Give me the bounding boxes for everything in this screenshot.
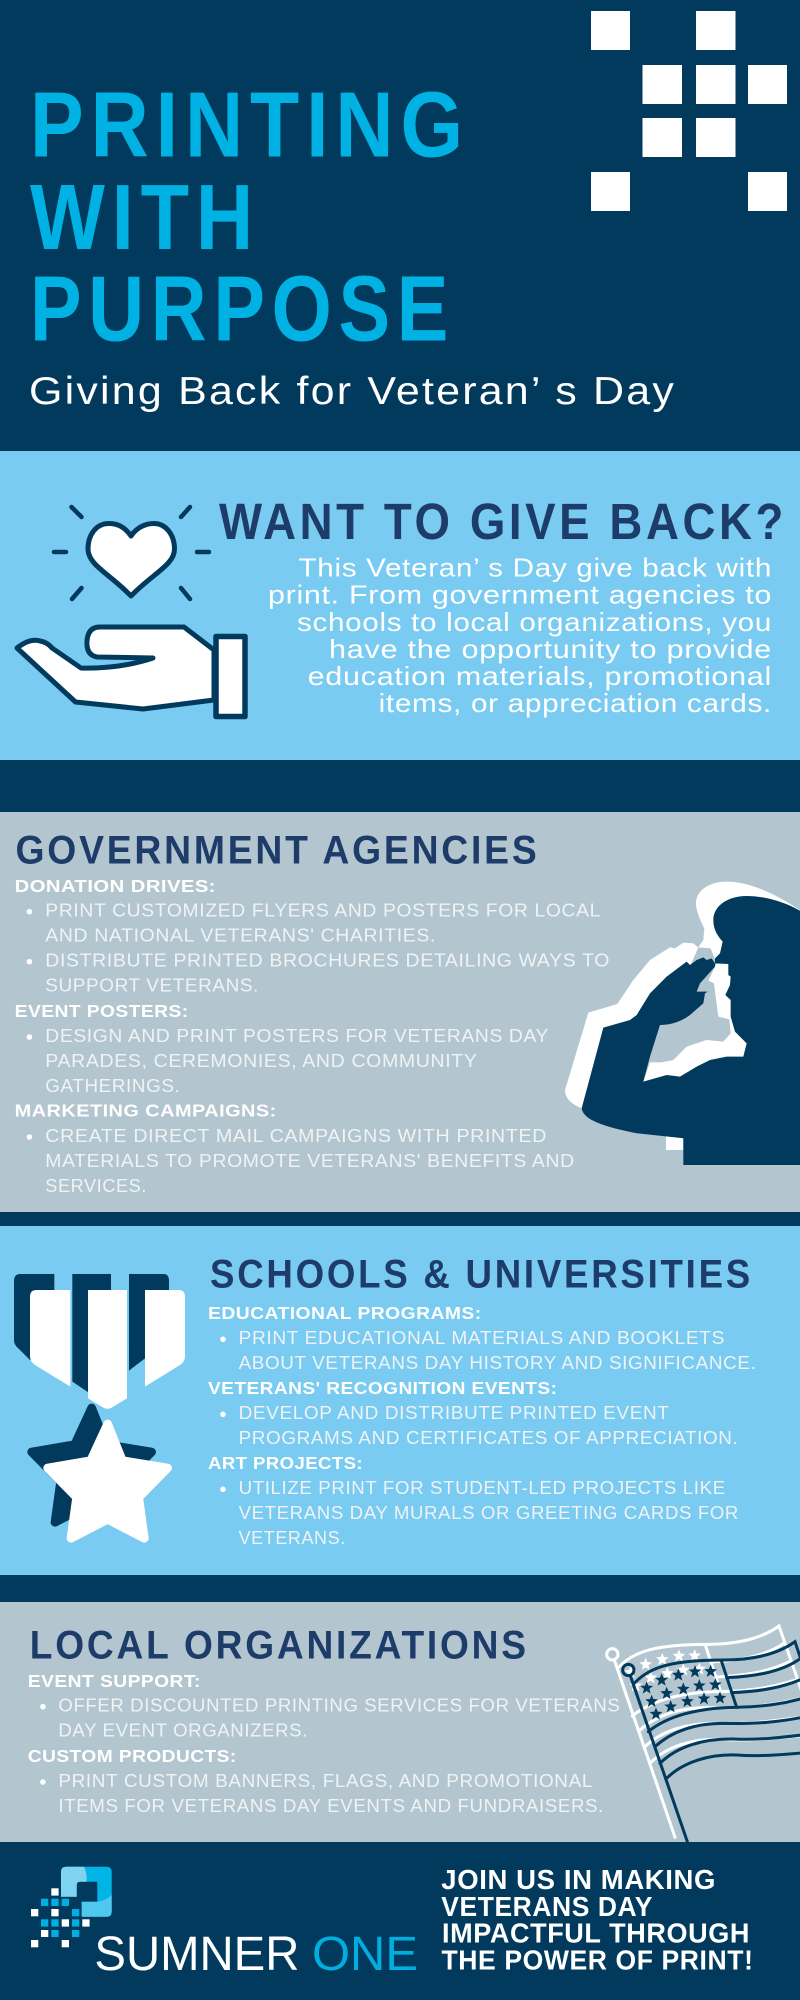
text block: donation drives bbox=[15, 876, 610, 996]
panel: local organizations bbox=[0, 1602, 800, 1842]
title: WITH bbox=[30, 165, 260, 269]
text block: marketing campaigns: CREATE DIRECT MAIL CAMPAIGNS WITH PRINTED bbox=[45, 1126, 547, 1146]
text block: event posters: GATHERINGS. bbox=[45, 1076, 180, 1096]
panel background bbox=[0, 812, 800, 1212]
text block: marketing campaigns: MATERIALS TO PROMOTE VETERANS' BENEFITS AND bbox=[45, 1151, 575, 1171]
icon: saluting soldier bbox=[565, 882, 800, 1165]
wordmark: SUMNER: SUMNER bbox=[94, 1928, 299, 1981]
wordmark: ONE: ONE bbox=[312, 1928, 418, 1981]
body text: schools to local organizations, you bbox=[297, 607, 772, 637]
text block: educational programs: ABOUT VETERANS DAY HISTORY AND SIGNIFICANCE. bbox=[239, 1353, 756, 1373]
callout: join us: THE POWER OF PRINT! bbox=[442, 1944, 754, 1975]
text block: custom products: PRINT CUSTOM BANNERS, FLAGS, AND PROMOTIONAL bbox=[58, 1771, 593, 1791]
subtitle: Giving Back for Veteran’ s Day bbox=[29, 370, 676, 413]
panel background bbox=[0, 451, 800, 760]
icon: flag bbox=[607, 1626, 800, 1842]
text block: event posters: DESIGN AND PRINT POSTERS FOR VETERANS DAY bbox=[45, 1026, 549, 1046]
text block: custom products bbox=[28, 1746, 604, 1816]
text block: recognition events bbox=[208, 1378, 738, 1448]
text block: event support: EVENT SUPPORT: bbox=[28, 1671, 201, 1691]
body text: education materials, promotional bbox=[308, 661, 772, 691]
logo: Sumner One bbox=[31, 1867, 418, 1981]
heading: SCHOOLS & UNIVERSITIES bbox=[210, 1253, 753, 1297]
text block: educational programs: PRINT EDUCATIONAL MATERIALS AND BOOKLETS bbox=[239, 1328, 725, 1348]
panel: government agencies bbox=[0, 812, 800, 1212]
heading: GOVERNMENT AGENCIES bbox=[16, 829, 540, 873]
text block: event posters: PARADES, CEREMONIES, AND COMMUNITY bbox=[45, 1051, 478, 1071]
text block: event support: DAY EVENT ORGANIZERS. bbox=[58, 1721, 308, 1741]
callout: join us bbox=[441, 1864, 754, 1975]
panel: schools and universities bbox=[0, 1226, 800, 1575]
text block: event support bbox=[28, 1671, 620, 1741]
text block: event support: OFFER DISCOUNTED PRINTING SERVICES FOR VETERANS bbox=[58, 1696, 620, 1716]
body text bbox=[268, 553, 772, 718]
icon: pixel squares bbox=[591, 11, 787, 211]
panel: want to give back bbox=[0, 451, 800, 760]
text block: art projects: UTILIZE PRINT FOR STUDENT-LED PROJECTS LIKE bbox=[239, 1478, 726, 1498]
text block: art projects bbox=[208, 1453, 739, 1548]
text block: event posters bbox=[15, 1001, 549, 1096]
text block: marketing campaigns: SERVICES. bbox=[45, 1176, 147, 1196]
panel: footer bbox=[31, 1864, 754, 1981]
icon: logo mark bbox=[31, 1867, 112, 1947]
panel background bbox=[0, 1226, 800, 1575]
text block: recognition events: PROGRAMS AND CERTIFICATES OF APPRECIATION. bbox=[239, 1428, 738, 1448]
title: PURPOSE bbox=[30, 257, 455, 361]
text block: donation drives: PRINT CUSTOMIZED FLYERS AND POSTERS FOR LOCAL bbox=[45, 901, 601, 921]
text block: educational programs bbox=[208, 1303, 756, 1373]
text block: art projects: VETERANS DAY MURALS OR GREETING CARDS FOR bbox=[239, 1503, 739, 1523]
text block: donation drives: SUPPORT VETERANS. bbox=[45, 976, 259, 996]
text block: donation drives: AND NATIONAL VETERANS' CHARITIES. bbox=[45, 926, 436, 946]
text block: donation drives: DISTRIBUTE PRINTED BROCHURES DETAILING WAYS TO bbox=[45, 951, 610, 971]
text block: marketing campaigns bbox=[15, 1101, 575, 1196]
text block: educational programs: EDUCATIONAL PROGRAMS: bbox=[208, 1303, 482, 1323]
panel background bbox=[0, 1602, 800, 1842]
text block: custom products: CUSTOM PRODUCTS: bbox=[28, 1746, 237, 1766]
text block: marketing campaigns: MARKETING CAMPAIGNS: bbox=[15, 1101, 277, 1121]
text block: recognition events: DEVELOP AND DISTRIBUTE PRINTED EVENT bbox=[239, 1403, 670, 1423]
callout: join us: JOIN US IN MAKING bbox=[441, 1864, 716, 1895]
icon: medal bbox=[14, 1274, 185, 1538]
body text: This Veteran’ s Day give back with bbox=[298, 553, 772, 583]
callout: join us: IMPACTFUL THROUGH bbox=[442, 1918, 750, 1949]
body text: have the opportunity to provide bbox=[329, 634, 772, 664]
text block: art projects: VETERANS. bbox=[239, 1528, 346, 1548]
title bbox=[30, 73, 470, 361]
text block: event posters: EVENT POSTERS: bbox=[15, 1001, 189, 1021]
title: PRINTING bbox=[30, 73, 470, 177]
panel: header bbox=[29, 11, 787, 413]
body text: items, or appreciation cards. bbox=[379, 688, 772, 718]
body text: print. From government agencies to bbox=[268, 580, 772, 610]
heading: LOCAL ORGANIZATIONS bbox=[30, 1624, 529, 1668]
text block: custom products: ITEMS FOR VETERANS DAY EVENTS AND FUNDRAISERS. bbox=[58, 1796, 604, 1816]
text block: recognition events: VETERANS' RECOGNITION EVENTS: bbox=[208, 1378, 557, 1398]
icon: heart in hand bbox=[17, 507, 245, 716]
callout: join us: VETERANS DAY bbox=[441, 1891, 653, 1922]
text block: art projects: ART PROJECTS: bbox=[208, 1453, 363, 1473]
text block: donation drives: DONATION DRIVES: bbox=[15, 876, 216, 896]
